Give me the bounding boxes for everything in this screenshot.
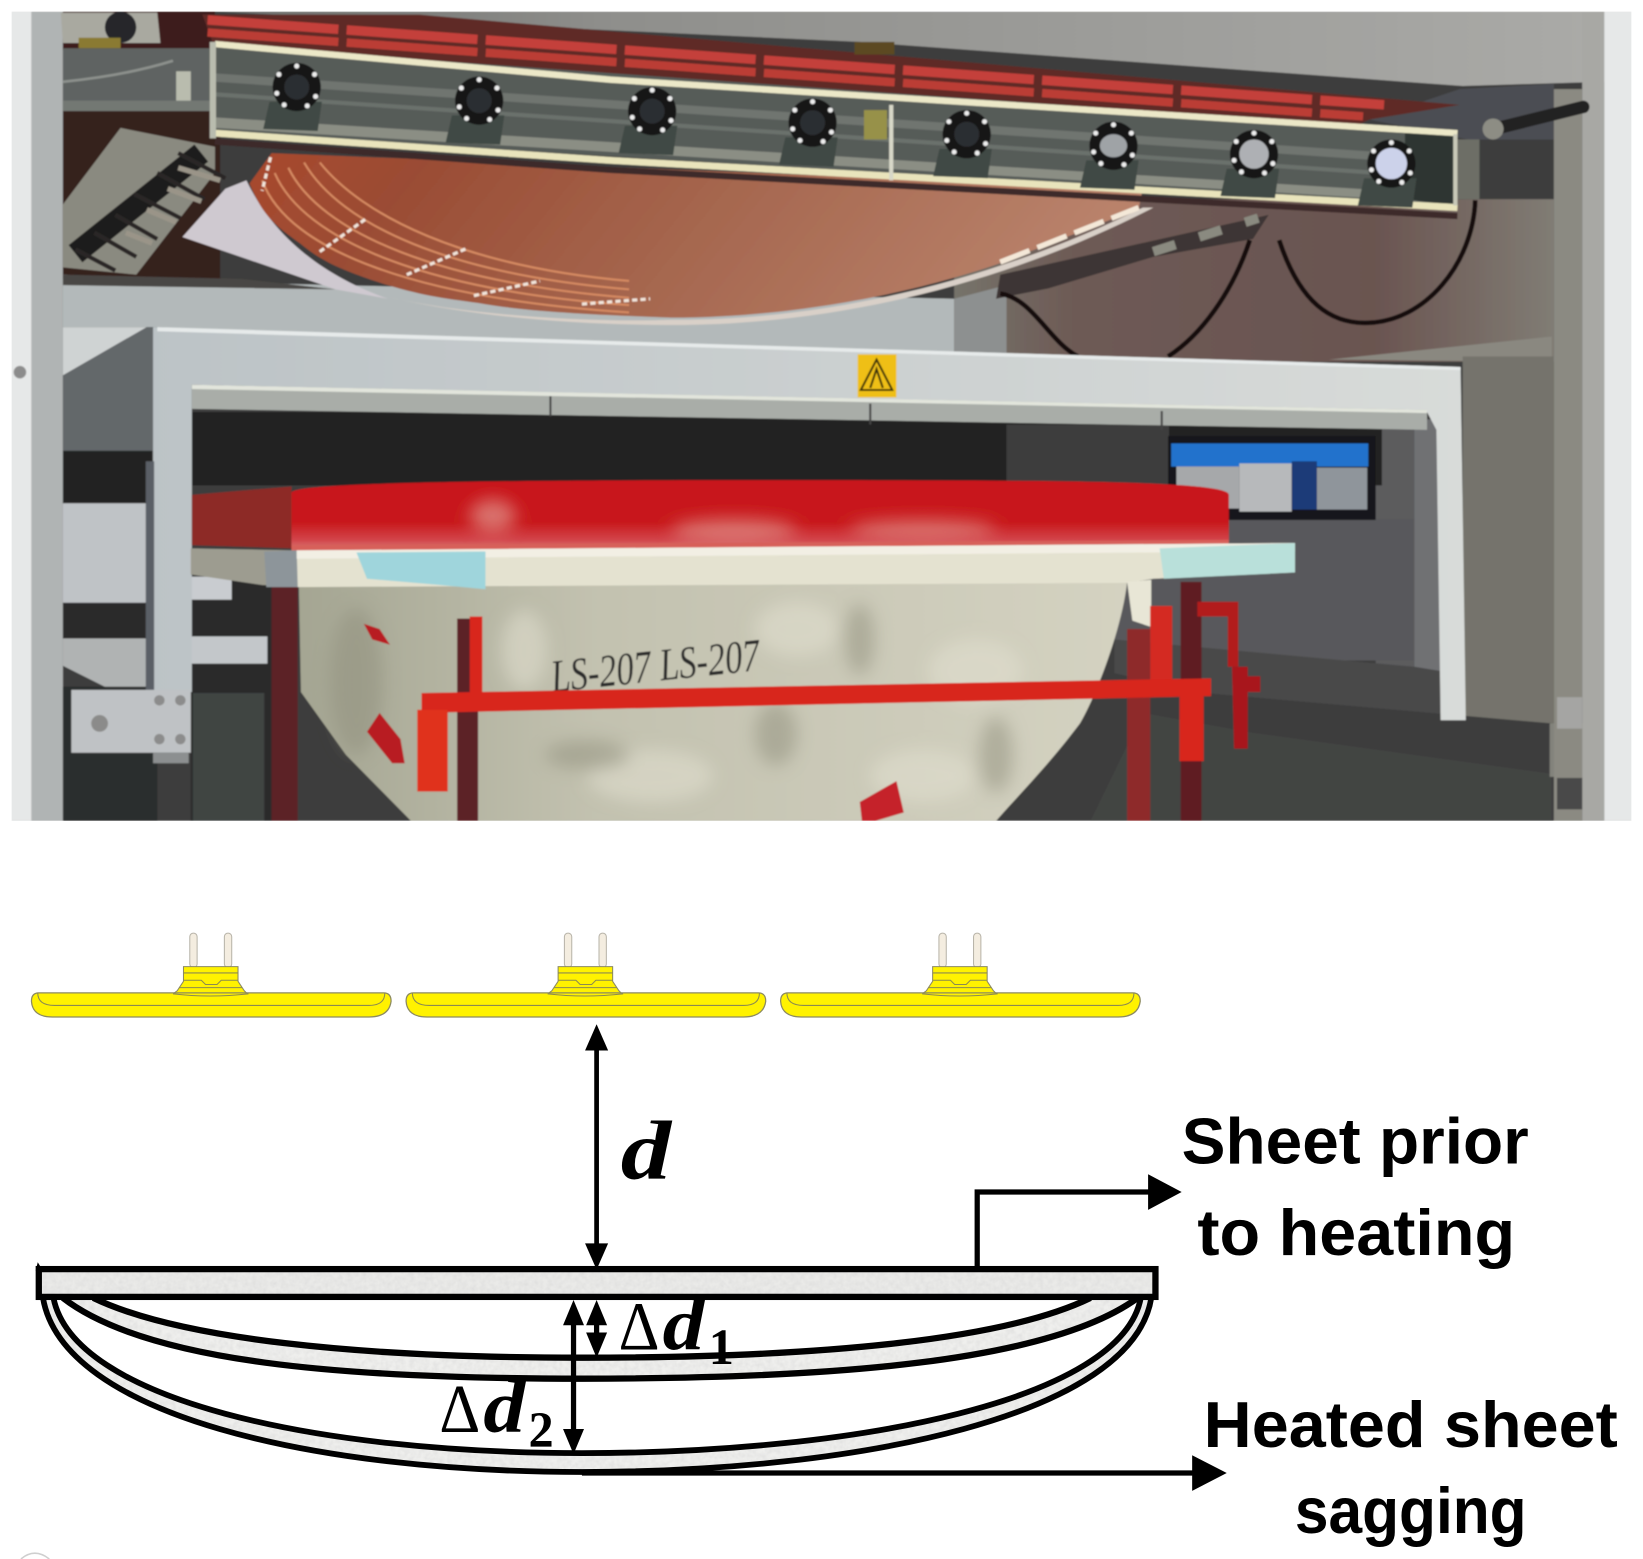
label: delta d1: d <box>663 1283 706 1366</box>
handwritten marking: LS-207 LS-207 <box>548 629 764 702</box>
computer screen in background <box>1168 436 1376 520</box>
red infrared heater bank <box>202 15 1460 128</box>
arrow: to sheet prior to heating label <box>977 1174 1182 1269</box>
label: heated sheet sagging: Heated sheet <box>1204 1388 1618 1461</box>
arrow: delta d1 <box>586 1300 607 1358</box>
left connectors and rails <box>61 12 225 279</box>
sagging plastic sheet <box>182 153 1269 325</box>
heater frame with eight fans <box>210 42 1457 216</box>
panel: schematic diagram <box>31 933 1618 1547</box>
light shelf band <box>63 275 954 362</box>
icon: heater 2 <box>406 933 766 1017</box>
label: delta d1: Δ <box>619 1287 660 1364</box>
label: delta d1: 1 <box>709 1319 734 1375</box>
label: sheet prior to heating <box>1182 1105 1529 1269</box>
arrow: to heated sheet sagging label <box>582 1455 1227 1491</box>
panel: photo of thermoforming machine <box>12 12 1631 821</box>
label: delta d2: Δ <box>439 1370 480 1447</box>
arrow: distance d <box>585 1024 608 1270</box>
warning sign <box>858 354 896 397</box>
heated sheet sagging: small sag <box>63 1298 1138 1379</box>
icon: heater 1 <box>31 933 391 1017</box>
mounting plate <box>71 690 191 763</box>
flat sheet prior to heating <box>36 1262 1155 1297</box>
red mould rim <box>192 480 1229 553</box>
plaster mould body <box>299 582 1127 821</box>
label: d: d <box>621 1104 672 1197</box>
label: delta d1 <box>619 1283 734 1375</box>
heated sheet sagging: large sag <box>43 1298 1151 1472</box>
small corner arc artifact <box>21 1553 49 1559</box>
mould stand legs <box>272 582 1202 821</box>
label: delta d2: 2 <box>528 1402 554 1458</box>
cables <box>1000 200 1475 356</box>
label: delta d2 <box>439 1366 554 1458</box>
label: sheet prior to heating: to heating <box>1197 1196 1515 1269</box>
red support bars <box>417 602 1260 821</box>
table and left parts <box>63 327 1466 821</box>
icon: heater 3 <box>781 933 1140 1017</box>
handle lever <box>1483 107 1583 139</box>
label: heated sheet sagging <box>1204 1388 1618 1547</box>
label: delta d2: d <box>483 1366 527 1449</box>
arrow: delta d2 <box>563 1300 584 1454</box>
label: sheet prior to heating: Sheet prior <box>1182 1105 1529 1178</box>
label: heated sheet sagging: sagging <box>1295 1474 1527 1547</box>
machine cabinet walls <box>12 12 1631 821</box>
white flange <box>191 543 1295 627</box>
